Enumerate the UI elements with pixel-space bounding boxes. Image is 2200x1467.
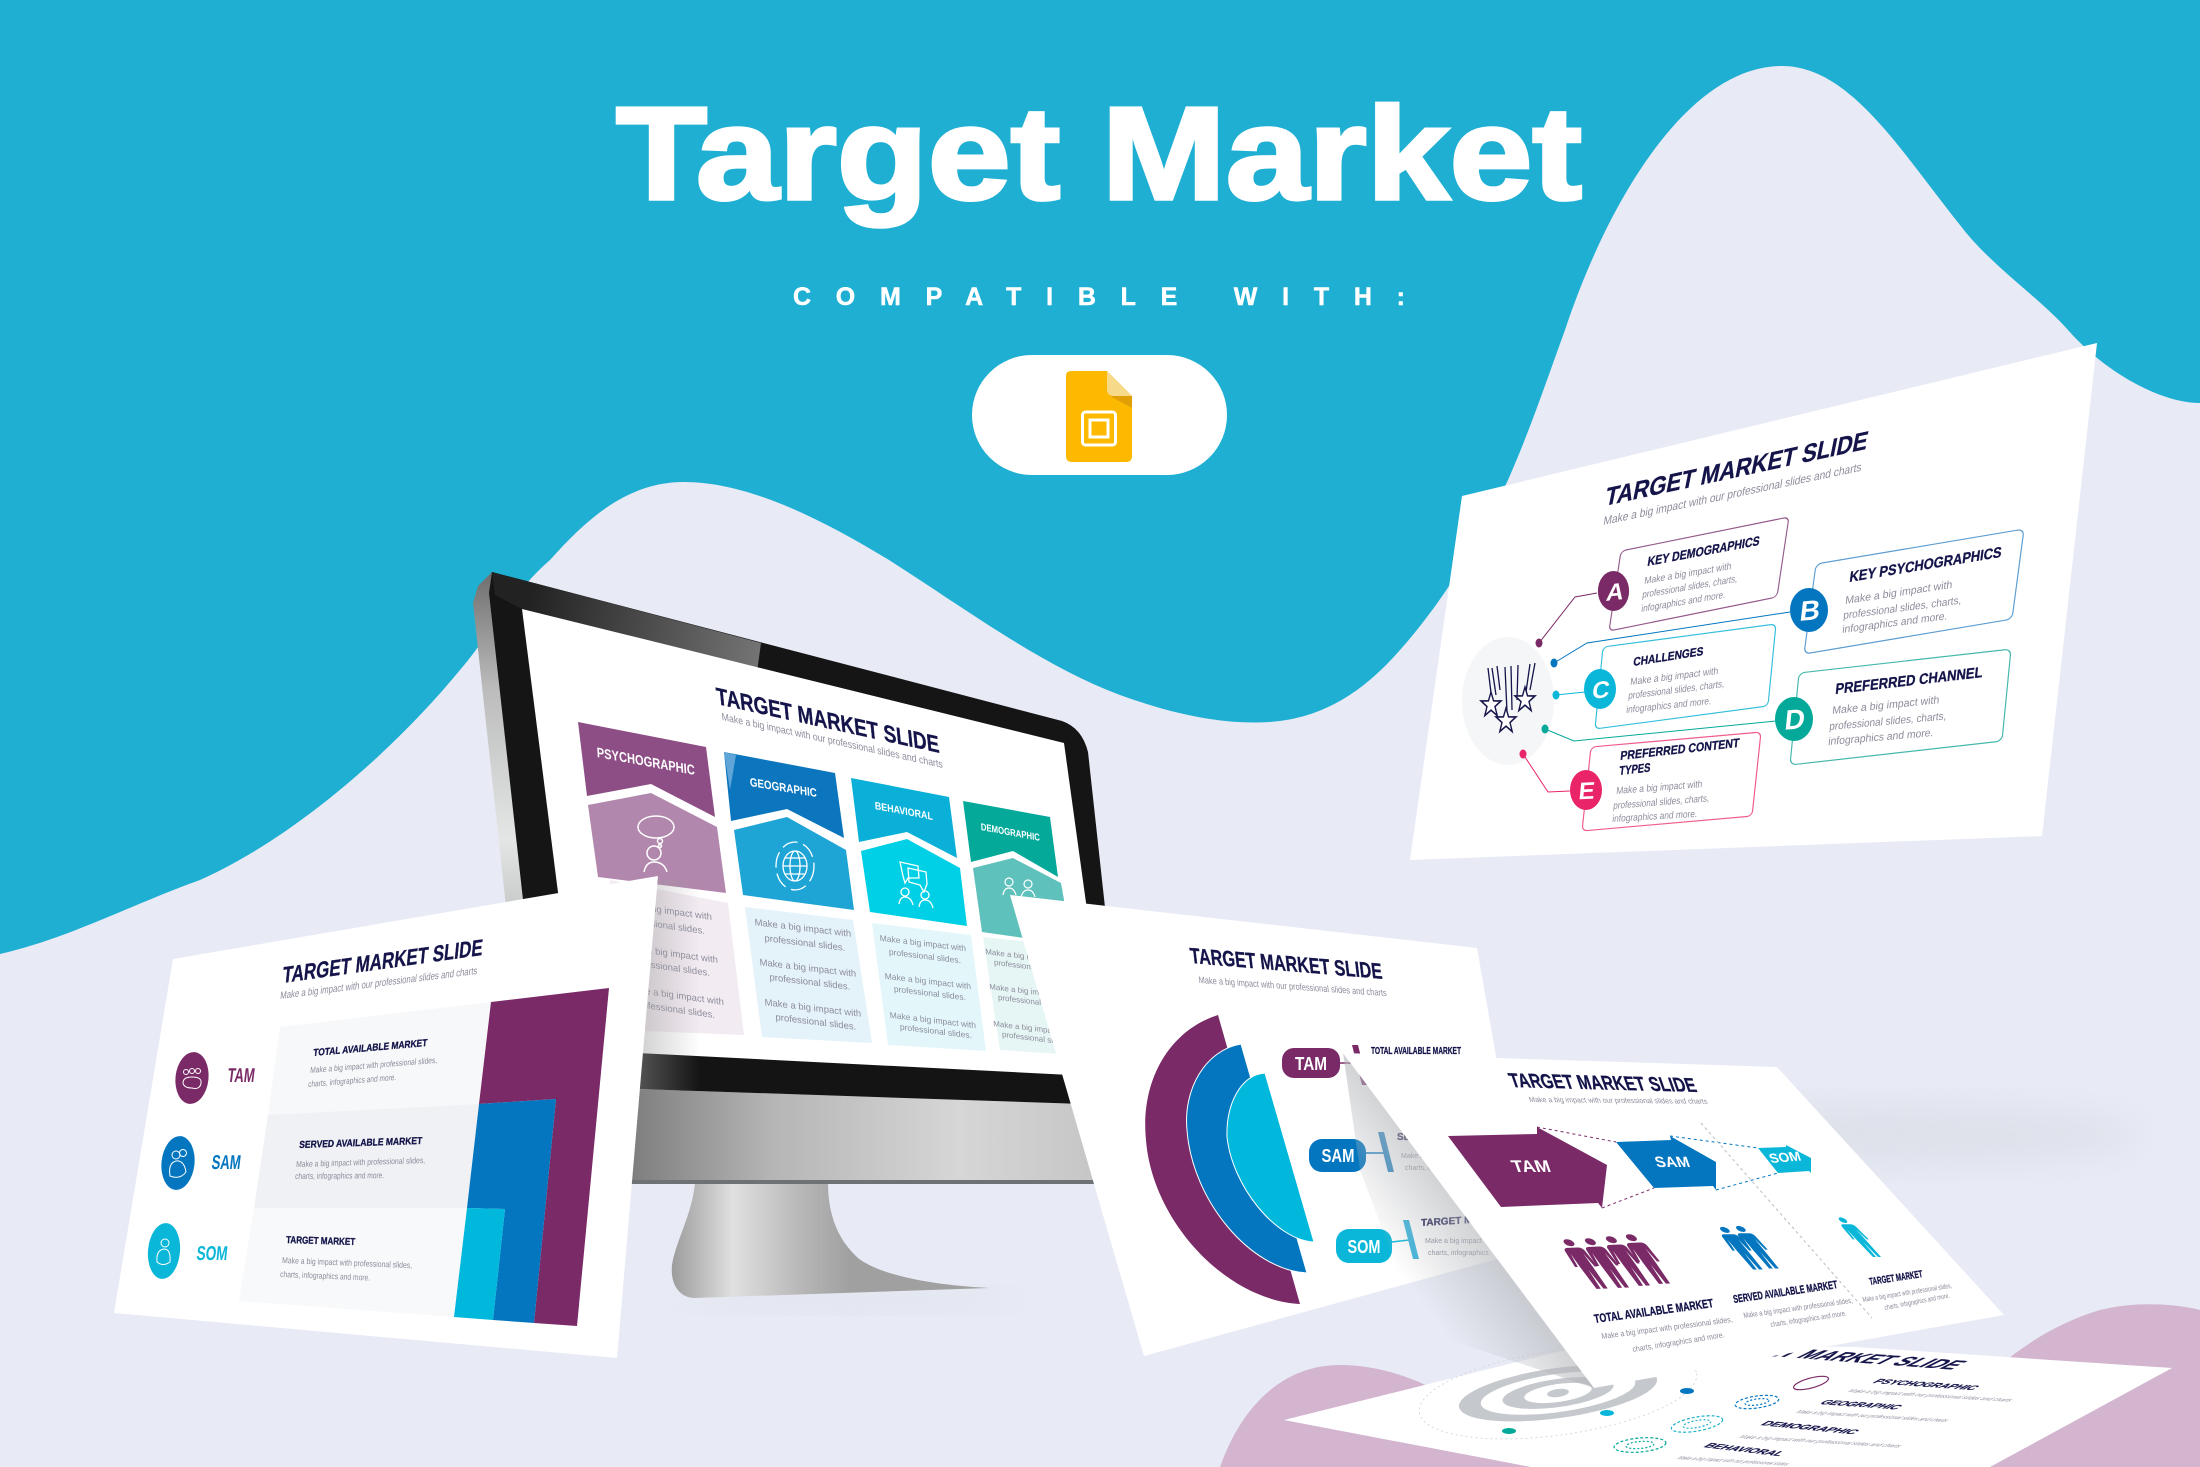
- funnel arrow: SOM: [1758, 1145, 1811, 1173]
- row: SAM: SERVED AVAILABLE MARKET: [299, 1136, 423, 1151]
- card: key psychographics: professional slides, charts,: [1843, 595, 1962, 622]
- row: SAM: Make a big impact with professional slides,: [296, 1155, 425, 1169]
- column: demographic: professional slides.: [998, 993, 1066, 1010]
- label: SAM: [1309, 1132, 1542, 1172]
- label: TAM: [1282, 1045, 1461, 1085]
- label: SOM: TARGET MARKET: [1421, 1213, 1507, 1229]
- label: SAM: SERVED AVAILABLE MARKET: [1397, 1132, 1542, 1143]
- card: key demographics: [1598, 533, 1761, 615]
- slide title: TARGET MARKET SLIDE: [1603, 425, 1871, 512]
- text: served available market: charts, infographics and more.: [1770, 1309, 1847, 1329]
- column: behavioral: Make a big impact with: [889, 1010, 976, 1030]
- row: SOM: Make a big impact with professional slides,: [282, 1255, 412, 1270]
- icon: thought bubble person: [638, 816, 674, 872]
- floor slide rows: BEHAVIORAL: [1700, 1441, 1789, 1458]
- column: behavioral: BEHAVIORAL: [875, 800, 934, 823]
- card: key psychographics: KEY PSYCHOGRAPHICS: [1848, 544, 2003, 586]
- floor slide rows: PSYCHOGRAPHIC: [1869, 1377, 1984, 1392]
- label: SOM: [1336, 1213, 1507, 1263]
- stand shadow: [680, 1290, 1020, 1310]
- card: preferred content types: Make a big impact with: [1616, 779, 1703, 797]
- row: SAM: charts, infographics and more.: [295, 1170, 384, 1181]
- text: total available market: Make a big impact with professional slides,: [1601, 1315, 1733, 1341]
- row: SOM: charts, infographics and more.: [280, 1269, 370, 1283]
- column: psychographic: Make a big impact with: [621, 942, 718, 966]
- text: served available market: [1732, 1279, 1853, 1329]
- card outlines: [1582, 517, 2024, 831]
- monitor: [473, 572, 1125, 1310]
- column: behavioral: [851, 778, 986, 1051]
- column: psychographic: Make a big impact with: [627, 984, 724, 1008]
- column: psychographic: professional slides.: [634, 999, 715, 1021]
- card: challenges: C: [1591, 676, 1611, 705]
- floor slide rows: GEOGRAPHIC: [1816, 1398, 1907, 1411]
- text: target market: TARGET MARKET: [1868, 1269, 1924, 1288]
- card: preferred channel: [1775, 664, 1983, 748]
- slide subtitle: Make a big impact with our professional slides and charts: [280, 965, 478, 1002]
- column: demographic: professional slides.: [1002, 1030, 1070, 1047]
- column: geographic: professional slides.: [764, 933, 846, 954]
- monitor stand: [672, 1183, 989, 1298]
- title: Target Market: [616, 80, 1582, 227]
- row: SAM: [159, 1134, 425, 1192]
- people: TAM: [1555, 1234, 1676, 1289]
- column: geographic: Make a big impact with: [759, 957, 856, 980]
- panel: front funnel slide: [1343, 1053, 2004, 1388]
- slide subtitle: Make a big impact with our professional slides and charts: [1198, 975, 1388, 999]
- column: demographic: Make a big impact with: [993, 1019, 1075, 1038]
- people: SAM: [1713, 1226, 1784, 1270]
- screen title: TARGET MARKET SLIDE: [715, 683, 941, 759]
- panel: left TAM SAM SOM slide: [114, 876, 658, 1358]
- card: preferred content types: TYPES: [1619, 761, 1651, 778]
- floor slide title: TARGET MARKET SLIDE: [1699, 1341, 1973, 1372]
- column: psychographic: professional slides.: [629, 957, 710, 979]
- card: preferred content types: E: [1577, 778, 1596, 805]
- funnel arrow: TAM: [1448, 1127, 1607, 1208]
- card: challenges: infographics and more.: [1626, 696, 1712, 716]
- label: SAM: SAM: [1322, 1146, 1354, 1166]
- icon: medals with stars: [1481, 663, 1535, 732]
- row: SOM: SOM: [196, 1243, 229, 1265]
- text: total available market: charts, infographics and more.: [1632, 1330, 1725, 1354]
- label: TAM: TOTAL AVAILABLE MARKET: [1371, 1046, 1461, 1057]
- monitor chin: [580, 1087, 1120, 1183]
- badge: google slides pill: [972, 355, 1227, 475]
- card: challenges: professional slides, charts,: [1628, 679, 1725, 702]
- card: challenges: Make a big impact with: [1630, 666, 1719, 688]
- column: psychographic: PSYCHOGRAPHIC: [596, 744, 695, 778]
- text: total available market: TOTAL AVAILABLE MARKET: [1593, 1296, 1715, 1326]
- card: key demographics: Make a big impact with: [1644, 561, 1732, 587]
- card: key psychographics: Make a big impact with: [1845, 579, 1953, 607]
- panel: key demographics slide: [1410, 343, 2097, 860]
- card: preferred channel: professional slides, charts,: [1829, 711, 1947, 733]
- column: behavioral: professional slides.: [894, 984, 966, 1002]
- card: key demographics: professional slides, charts,: [1642, 574, 1738, 601]
- column: geographic: Make a big impact with: [764, 997, 861, 1020]
- row: TAM: Make a big impact with professional slides,: [310, 1055, 438, 1075]
- card: preferred content types: professional slides, charts,: [1613, 793, 1710, 812]
- monitor bezel: [489, 572, 1125, 1090]
- floor slide rows: Make a big impact with our professional slides and charts: [1736, 1434, 1905, 1449]
- icon: globe: [776, 842, 814, 890]
- label: SOM: SOM: [1348, 1237, 1380, 1257]
- card: preferred channel: Make a big impact with: [1832, 694, 1940, 717]
- column: demographic: [963, 801, 1075, 1055]
- column: behavioral: Make a big impact with: [879, 933, 966, 953]
- column: psychographic: Make a big impact with: [615, 899, 712, 923]
- decorative: pink blob left: [1220, 1365, 1540, 1467]
- column: geographic: [724, 752, 872, 1043]
- column: behavioral: Make a big impact with: [884, 971, 971, 991]
- card: preferred channel: D: [1783, 703, 1807, 736]
- row: TAM: [173, 1038, 438, 1106]
- people: SOM: [1832, 1217, 1885, 1257]
- floor slide rows: Make a big impact with our professional slides and charts: [1845, 1388, 2016, 1403]
- card: key psychographics: [1790, 544, 2003, 636]
- screen subtitle: Make a big impact with our professional slides and charts: [721, 711, 943, 771]
- slide title: TARGET MARKET SLIDE: [282, 934, 484, 988]
- decorative: soft floor shading: [1620, 1105, 2140, 1165]
- subtitle: compatible with: COMPATIBLE WITH:: [793, 283, 1405, 311]
- slide subtitle: Make a big impact with our professional slides and charts: [1603, 460, 1863, 528]
- column: geographic: GEOGRAPHIC: [749, 775, 817, 800]
- content bands: [268, 1002, 491, 1115]
- label: SOM: charts, infographics: [1428, 1250, 1489, 1257]
- card: key demographics: KEY DEMOGRAPHICS: [1647, 533, 1761, 569]
- shadow of front slide: [1343, 1053, 1594, 1388]
- card: challenges: [1584, 644, 1725, 716]
- target chart: [1414, 1332, 1702, 1454]
- card: preferred content types: infographics and more.: [1612, 809, 1698, 825]
- card: key psychographics: infographics and more.: [1842, 610, 1948, 636]
- label: TAM: TAM: [1295, 1054, 1327, 1074]
- card: key demographics: A: [1604, 578, 1626, 607]
- card: key psychographics: B: [1798, 593, 1822, 627]
- bezel bottom strip: [578, 1050, 1112, 1105]
- monitor side edge: [473, 572, 530, 907]
- card: preferred content types: [1570, 736, 1740, 825]
- row: TAM: TOTAL AVAILABLE MARKET: [313, 1038, 429, 1059]
- column: psychographic: professional slides.: [624, 915, 705, 937]
- column: behavioral: professional slides.: [900, 1022, 972, 1040]
- text: target market: [1862, 1269, 1952, 1312]
- stepped chart: [454, 988, 609, 1326]
- card: preferred channel: PREFERRED CHANNEL: [1835, 664, 1983, 698]
- panel: bottom floor slide: [1284, 1332, 2172, 1467]
- column: demographic: DEMOGRAPHIC: [981, 822, 1040, 844]
- connectors: [1520, 593, 1790, 792]
- label: SAM: Make a big impact: [1401, 1153, 1458, 1160]
- shadow of left slide on monitor: [620, 880, 700, 1090]
- card: preferred channel: infographics and more.: [1828, 727, 1934, 748]
- semicircle chart: [1145, 1015, 1314, 1304]
- floor slide rows: DEMOGRAPHIC: [1757, 1419, 1864, 1436]
- text: target market: Make a big impact with professional slides,: [1862, 1282, 1952, 1304]
- row: TAM: charts, infographics and more.: [308, 1072, 397, 1089]
- bezel glare: [492, 572, 761, 672]
- background: teal wave shape: [0, 0, 2200, 954]
- column: geographic: professional slides.: [769, 972, 851, 993]
- icon: people: [1003, 878, 1035, 897]
- floor icons: [1613, 1374, 1830, 1454]
- column: demographic: Make a big impact with: [989, 982, 1071, 1001]
- row: SAM: SAM: [210, 1152, 242, 1174]
- text: target market: charts, infographics and more.: [1884, 1292, 1950, 1312]
- panel: right semicircle slide: [1010, 895, 1542, 1356]
- column: psychographic: [578, 722, 744, 1035]
- row: SOM: TARGET MARKET: [286, 1235, 355, 1248]
- column: demographic: professional slides.: [994, 958, 1062, 975]
- card: key demographics: infographics and more.: [1641, 590, 1726, 615]
- monitor screen: [522, 609, 1110, 1077]
- slide title: TARGET MARKET SLIDE: [1506, 1070, 1700, 1097]
- slide subtitle: Make a big impact with our professional slides and charts: [1528, 1095, 1709, 1106]
- column: geographic: professional slides.: [775, 1012, 857, 1033]
- row: TAM: TAM: [226, 1065, 256, 1087]
- floor slide rows: [1674, 1377, 2016, 1467]
- funnel arrow: SOM: SOM: [1767, 1149, 1803, 1166]
- card: challenges: CHALLENGES: [1633, 644, 1704, 669]
- funnel arrow: TAM: TAM: [1509, 1156, 1553, 1176]
- label: SAM: charts, infographics: [1405, 1165, 1466, 1172]
- funnel arrow: SAM: SAM: [1653, 1154, 1692, 1171]
- central medal circle: [1462, 637, 1554, 765]
- dashed guides: [1537, 1123, 1872, 1318]
- decorative: pink blob right: [1900, 1304, 2200, 1467]
- row: SOM: [146, 1222, 412, 1283]
- column: demographic: Make a big impact with: [985, 947, 1067, 966]
- column: geographic: Make a big impact with: [754, 917, 851, 940]
- floor slide rows: Make a big impact with our professional slides and charts: [1793, 1409, 1952, 1423]
- icon: google slides: [1066, 371, 1132, 462]
- text: served available market: SERVED AVAILABLE MARKET: [1732, 1279, 1839, 1306]
- text: total available market: [1593, 1296, 1733, 1354]
- label: SOM: Make a big impact: [1425, 1238, 1482, 1245]
- card: preferred content types: PREFERRED CONTENT: [1620, 736, 1740, 763]
- icon: chat people: [899, 862, 933, 908]
- column: behavioral: professional slides.: [889, 947, 961, 965]
- slide title: TARGET MARKET SLIDE: [1189, 943, 1384, 984]
- text: served available market: Make a big impact with professional slides,: [1743, 1296, 1853, 1320]
- funnel arrow: SAM: [1616, 1136, 1716, 1190]
